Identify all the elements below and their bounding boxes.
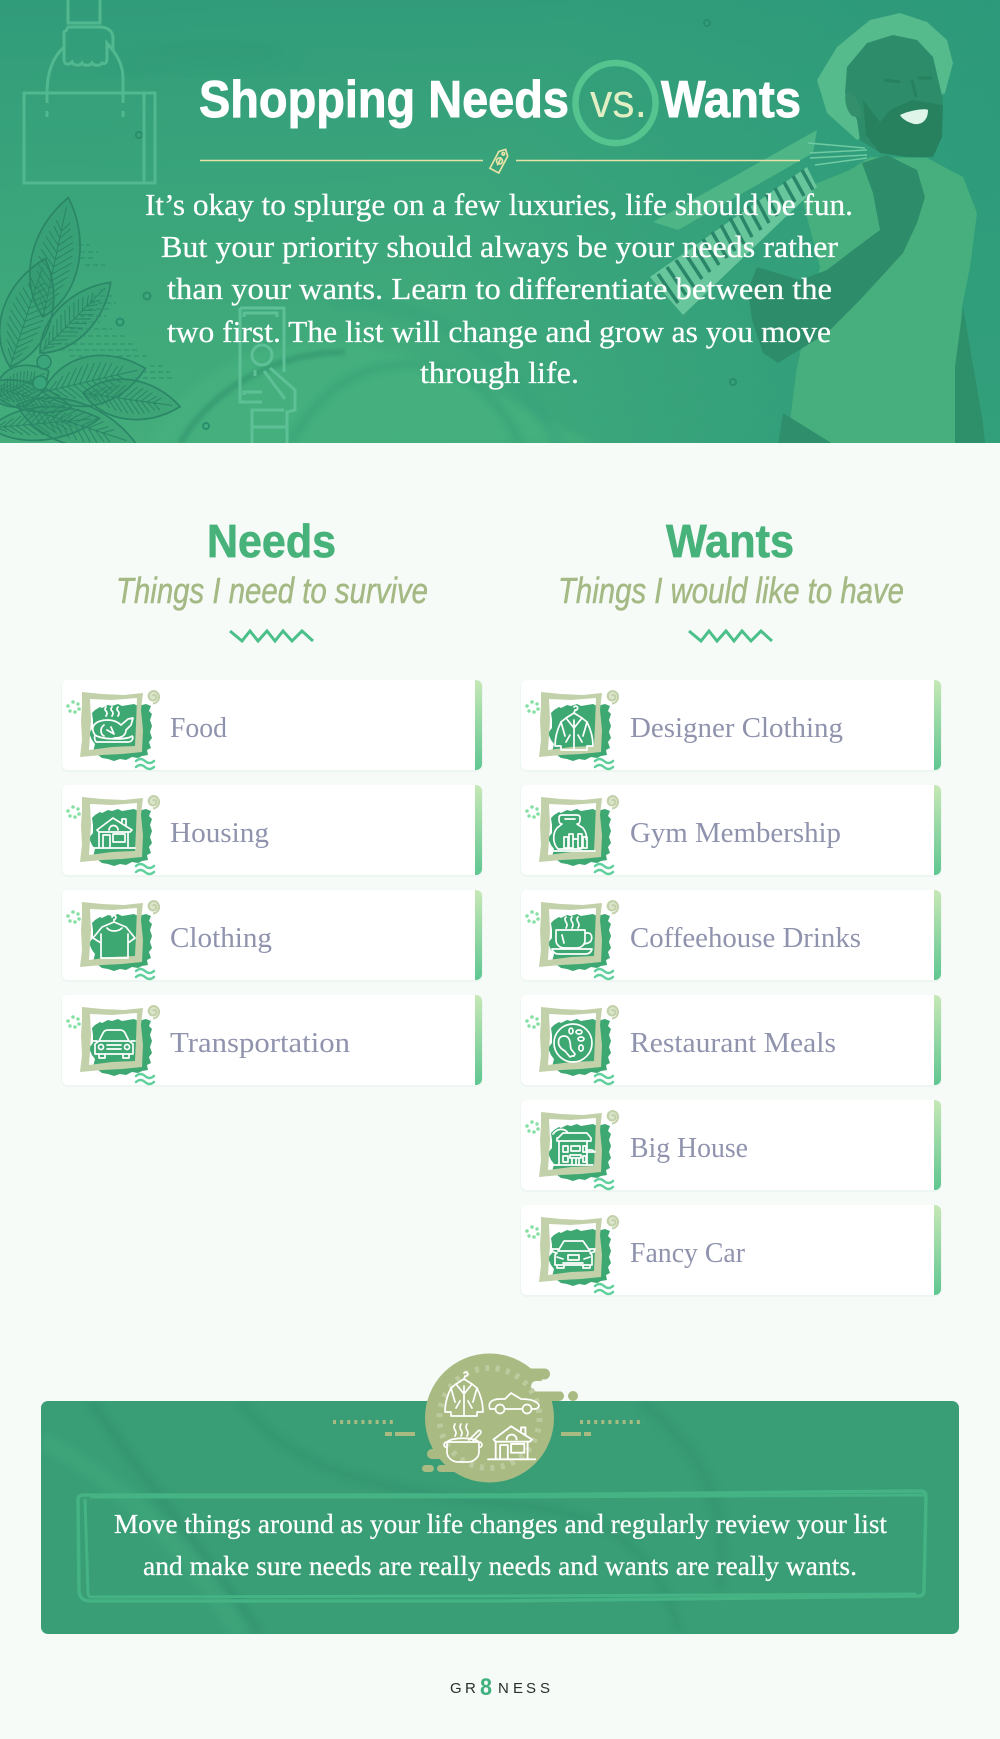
label: Food [170,712,227,744]
needs column heading: Needs [207,515,336,567]
intro paragraph: two first. The list will change and grow as you move [167,314,831,349]
hand and forearm [748,155,925,363]
motion streaks [422,1368,578,1472]
title: Shopping Needs [199,71,569,129]
icon: plate with chicken leg [525,1006,618,1084]
icon: house [66,796,159,874]
card: Housing [61,785,483,877]
beard [863,100,943,157]
icon: kettlebell and bench [525,796,618,874]
card: Food [61,680,483,772]
logo: GR [450,1680,476,1697]
title [199,63,801,143]
intro paragraph [145,187,853,390]
title: Wants [661,71,801,129]
icon: house [488,1426,535,1459]
eyes and brows [884,78,932,97]
icon: jacket [445,1372,483,1416]
card: Fancy Car [520,1205,942,1297]
bottom panel [41,1354,959,1634]
intro paragraph: than your wants. Learn to differentiate between the [167,271,832,306]
vs badge: vs. [590,74,647,127]
hero panel [0,0,1000,464]
icon: roast chicken [66,690,159,769]
wants subtitle: Things I would like to have [558,570,904,611]
vs badge [576,63,656,143]
bag outline with hand [24,0,155,183]
card: Coffeehouse Drinks [520,890,942,982]
card: Transportation [61,995,483,1087]
icon: coffee cup [525,900,618,979]
arm far [955,307,985,444]
wants column heading: Wants [666,515,794,567]
icon: convertible [489,1393,539,1414]
ear [845,94,856,117]
closing message [114,1509,888,1581]
label: Restaurant Meals [630,1027,836,1059]
head [845,35,943,157]
label: Gym Membership [630,817,841,849]
intro paragraph: It’s okay to splurge on a few luxuries, life should be fun. [145,187,853,222]
label: Fancy Car [630,1237,745,1269]
botanical leaves illustration [0,193,183,464]
zigzag [689,631,772,641]
hand-drawn callout box [78,1491,926,1601]
icon: jacket [525,690,618,769]
man with shopping bags [650,13,985,444]
intro paragraph: But your priority should always be your needs rather [161,229,839,264]
intro paragraph: through life. [420,355,579,390]
needs column heading [116,515,428,641]
zigzag [230,631,313,641]
label: Transportation [170,1027,351,1059]
card: Designer Clothing [520,680,942,772]
badge: circle with four icons [422,1354,578,1482]
card: Gym Membership [520,785,942,877]
divider with price tag icon [200,147,800,173]
hat [817,13,953,140]
needs subtitle: Things I need to survive [116,570,428,611]
wants column heading [558,515,904,641]
label: Housing [170,817,269,849]
icon: t-shirt on hanger [66,900,159,979]
label: Clothing [170,922,272,954]
label: Big House [630,1132,748,1164]
phone in hand outline [240,308,295,443]
label: Designer Clothing [630,712,843,744]
closing message: and make sure needs are really needs and wants are really wants. [143,1551,857,1581]
logo [450,1674,550,1701]
shirt [787,157,977,444]
smile [900,109,928,124]
logo: 8 [480,1674,492,1701]
shorts [778,413,833,444]
paper bag [650,130,867,315]
icon: pot of soup [444,1424,482,1462]
icon: fancy car [525,1216,618,1294]
decorative dashes [333,1422,644,1436]
card: Restaurant Meals [520,995,942,1087]
card: Clothing [61,890,483,982]
card: Big House [520,1100,942,1192]
icon: mansion [525,1110,618,1189]
icon: car [66,1006,159,1084]
label: Coffeehouse Drinks [630,922,861,954]
logo: NESS [498,1680,550,1697]
closing message: Move things around as your life changes and regularly review your list [114,1509,888,1539]
